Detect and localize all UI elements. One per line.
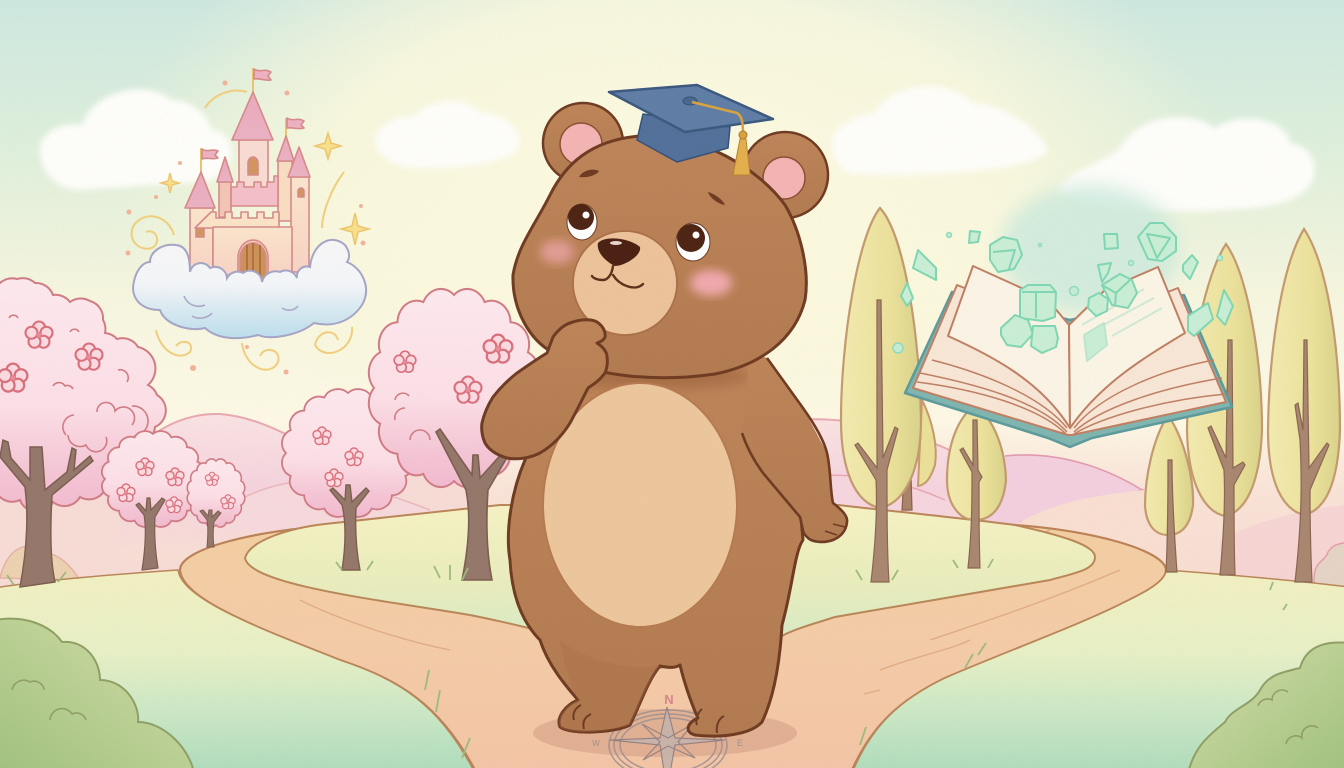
- poplar 6: [1268, 229, 1340, 582]
- right ear: [742, 132, 828, 218]
- thought: fairy-tale castle on cloud: [126, 68, 369, 374]
- compass rose: [592, 692, 743, 768]
- compass letter E: E: [737, 738, 743, 748]
- gems: [901, 223, 1233, 361]
- compass letter N: N: [664, 692, 674, 707]
- poplar 1: [841, 208, 921, 582]
- body and legs: [508, 355, 803, 736]
- eyebrows: [579, 170, 725, 205]
- clouds: [40, 86, 1315, 211]
- grass island between the paths: [245, 505, 1095, 668]
- cloud puffs: [184, 296, 298, 318]
- tree: medium cherry: [282, 389, 414, 570]
- poplar 5: [1187, 244, 1262, 575]
- cloud: far left: [40, 89, 232, 190]
- graduation cap: [609, 85, 773, 175]
- swirls and sparkles: [132, 91, 352, 370]
- compass letter W: W: [592, 739, 600, 748]
- leg shading: [559, 640, 660, 732]
- bush: left: [0, 619, 194, 768]
- grass left foreground: [0, 570, 475, 768]
- cloud: left of centre: [376, 101, 520, 168]
- sparkles: [161, 133, 369, 245]
- thought: open book with floating gems: [893, 223, 1233, 447]
- tree: large cherry left: [0, 278, 166, 587]
- teal mist behind book: [1000, 185, 1180, 315]
- top right page: [1069, 267, 1185, 428]
- eye left: [567, 204, 597, 240]
- blush left: [540, 240, 574, 264]
- belly: [543, 383, 737, 627]
- bush: right: [1188, 642, 1344, 768]
- mouth: [592, 266, 643, 287]
- poplar trees: [841, 208, 1340, 582]
- tree: small cherry 2: [187, 459, 245, 547]
- right arm: [742, 352, 847, 542]
- compass shadow under bear: [533, 709, 797, 757]
- grass right foreground: [852, 570, 1344, 768]
- distant pink hills: [0, 414, 1344, 610]
- eye right: [676, 223, 710, 261]
- head: [513, 136, 806, 378]
- poplar 4: [1145, 415, 1193, 572]
- left arm with paw on chin: [482, 320, 607, 459]
- back poplar behind horizon: [902, 400, 936, 510]
- cloud: far right: [1058, 117, 1315, 211]
- left ear: [543, 103, 623, 183]
- neck shadow: [560, 363, 750, 389]
- blush right: [690, 270, 732, 296]
- castle: [185, 68, 310, 282]
- poplar 3: [947, 405, 1006, 568]
- path: Y-shaped fork: [180, 500, 1166, 768]
- tree: small cherry 1: [102, 431, 204, 570]
- top left page: [948, 266, 1070, 428]
- toe lines: [573, 705, 724, 733]
- cloud under castle: [133, 240, 366, 338]
- book cover: [905, 292, 1232, 447]
- grass tufts: [7, 559, 1287, 758]
- bear character: [482, 85, 847, 736]
- foreground path and island: [180, 500, 1166, 768]
- cloud: right of centre: [832, 86, 1047, 175]
- muzzle: [573, 231, 677, 335]
- lower pages: [913, 285, 1226, 435]
- path wear marks: [300, 530, 1120, 694]
- tree: tall cherry: [369, 289, 539, 580]
- nose: [598, 238, 640, 266]
